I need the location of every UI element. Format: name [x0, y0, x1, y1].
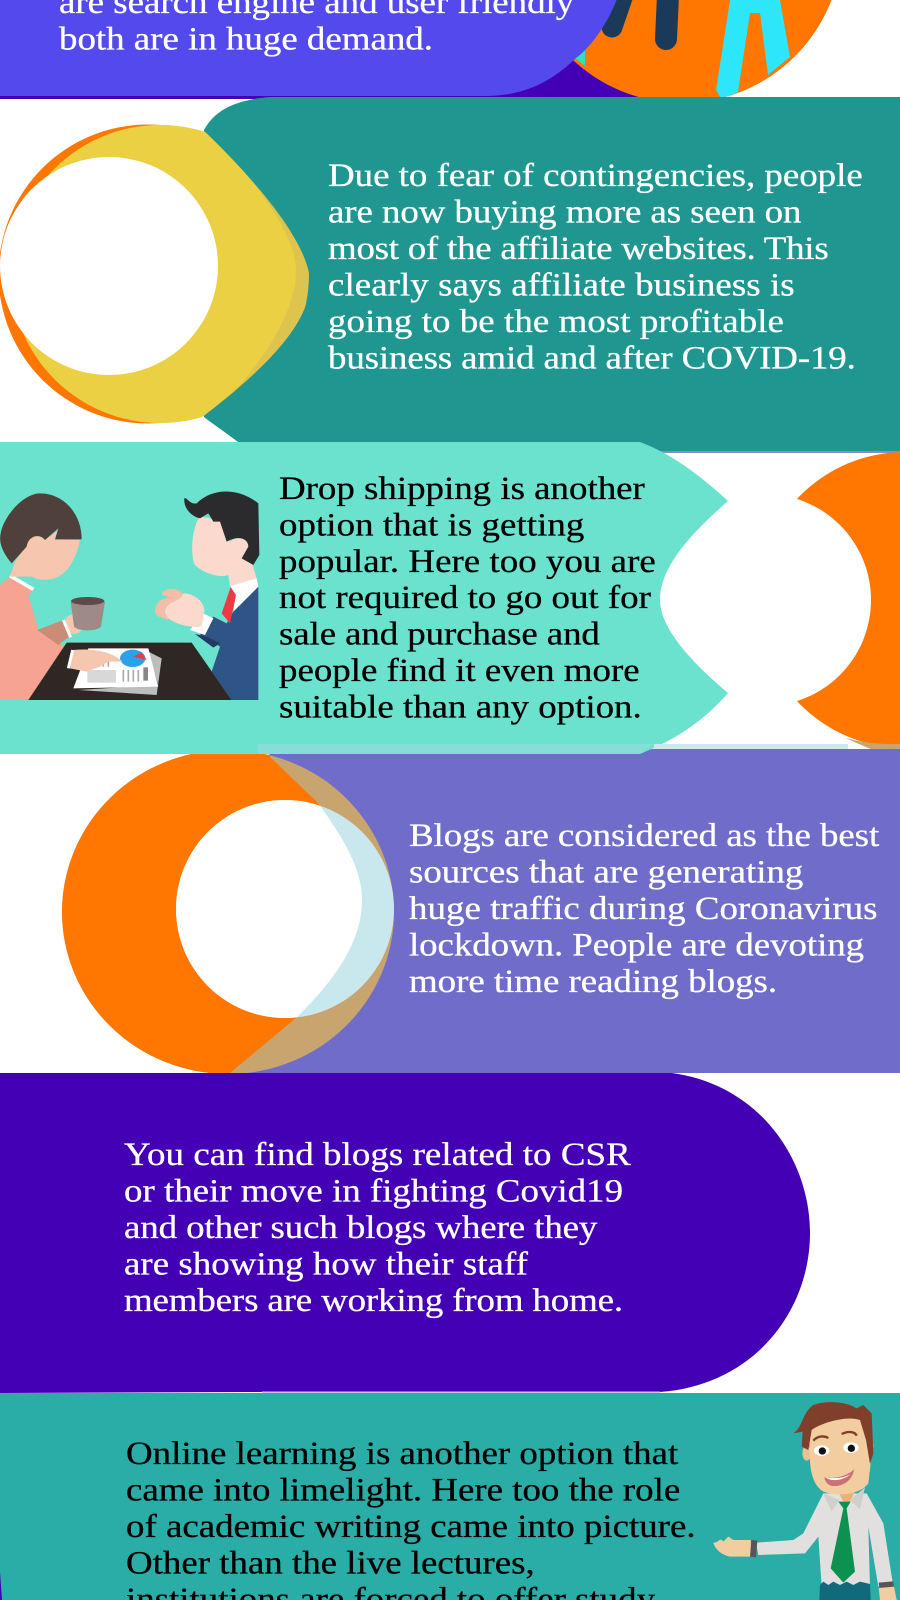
text: affiliate business: business amid and after COVID-19.	[328, 339, 856, 376]
panel: online learning	[0, 1393, 900, 1600]
text: blogs: sources that are generating	[409, 853, 803, 890]
icon: right orange ring	[659, 452, 900, 753]
text: drop shipping: suitable than any option.	[279, 688, 642, 725]
illustration: presenting man	[713, 1402, 897, 1600]
text: CSR blogs: are showing how their staff	[124, 1245, 528, 1282]
text: online learning: came into limelight. Here too the role	[126, 1471, 680, 1508]
panel: drop shipping	[0, 442, 848, 754]
text: CSR blogs: members are working from home.	[124, 1282, 623, 1319]
text: blogs: lockdown. People are devoting	[409, 926, 864, 963]
text: blogs: huge traffic during Coronavirus	[409, 890, 878, 927]
text: blogs: Blogs are considered as the best	[409, 817, 880, 854]
text: CSR blogs: or their move in fighting Covid19	[124, 1172, 623, 1209]
text: drop shipping: option that is getting	[279, 506, 584, 543]
icon: yellow ring	[0, 124, 309, 425]
text: affiliate business: Due to fear of contingencies, people	[328, 157, 863, 194]
panel: CSR blogs	[0, 1073, 810, 1393]
text: online learning: Other than the live lectures,	[126, 1544, 535, 1581]
text: drop shipping: popular. Here too you are	[279, 543, 656, 579]
text: affiliate business: clearly says affiliate business is	[328, 266, 795, 303]
panel: blogs as traffic sources	[62, 749, 900, 1074]
text: drop shipping: people find it even more	[279, 652, 640, 689]
icon: orange circle with legs	[574, 0, 832, 97]
panel: search engine friendly content	[0, 0, 842, 103]
text: search engine: both are in huge demand.	[59, 20, 433, 57]
text: drop shipping: sale and purchase and	[279, 615, 600, 652]
text: online learning: of academic writing came into picture.	[126, 1508, 696, 1545]
text: blogs: more time reading blogs.	[409, 963, 777, 1000]
text: online learning: Online learning is another option that	[126, 1435, 679, 1472]
text: CSR blogs: You can find blogs related to CSR	[124, 1136, 631, 1173]
text: affiliate business: are now buying more as seen on	[328, 193, 801, 230]
text: CSR blogs: and other such blogs where they	[124, 1209, 598, 1246]
text: affiliate business: going to be the most profitable	[328, 303, 784, 340]
text: affiliate business: most of the affiliate websites. This	[328, 230, 828, 267]
text: drop shipping: not required to go out for	[279, 579, 651, 616]
icon: orange ring with lens	[62, 750, 394, 1074]
panel: affiliate business	[0, 97, 900, 453]
illustration: two people at a table	[0, 491, 259, 700]
text: drop shipping: Drop shipping is another	[279, 470, 645, 507]
